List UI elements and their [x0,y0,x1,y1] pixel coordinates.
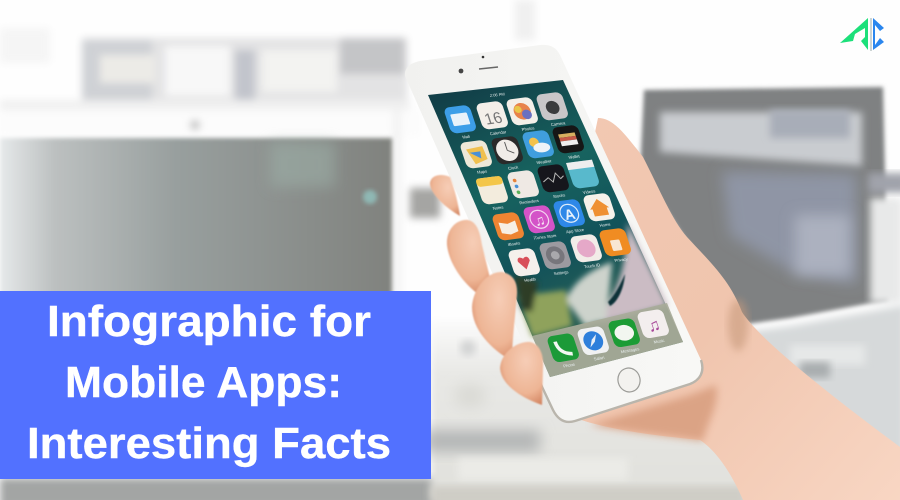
row 1: Mail [462,134,471,140]
monitor [640,87,900,500]
finger 4 [500,342,543,405]
fingers [430,175,543,405]
row 5 [507,228,635,284]
dock icons: Phone [562,362,576,369]
row 4: iBooks [507,241,521,247]
row 2: Wallet [568,153,581,160]
row 1: Calendar [489,129,508,136]
title text: Interesting Facts [27,419,391,468]
row 5: Settings [553,269,569,276]
row 4: iTunes Store [533,233,558,241]
row 3: Notes [492,205,504,211]
logo: divider [870,18,872,51]
finger 1 [430,175,460,216]
title text: Infographic for [47,297,371,346]
row 5: Touch ID [583,262,601,269]
earpiece and camera [459,56,498,73]
wallpaper dark slash [608,274,625,306]
row 4: ♫ [532,213,548,230]
row 1: 16 [482,110,505,129]
logo [840,18,884,51]
row 3: Stocks [552,193,566,199]
phone body [405,45,702,422]
row 5: Privacy [614,256,629,263]
row 3 [475,160,603,212]
dock icons: Messages [620,346,640,354]
row 2: Maps [476,169,488,175]
logo: blue C [873,18,884,50]
row 2: Clock [507,165,520,171]
row 2: Weather [536,158,553,165]
screen wallpaper [428,80,683,377]
wallpaper swirl [514,222,668,337]
row 4: Home [599,222,612,228]
row 3: Reminders [519,198,540,205]
row 3: Videos [582,189,596,195]
dock icons: ♫ [645,315,663,336]
row 4: App Store [565,227,585,234]
status bar: 2:06 PM [490,91,505,98]
app icons [443,92,673,370]
dock icons: Music [653,338,665,345]
lower desk [0,478,440,500]
phone [405,45,702,422]
title text [27,297,391,468]
row 4 [491,193,619,248]
laptop screen [0,138,392,298]
row 1: Photos [521,125,535,132]
title panel [0,291,431,479]
home button [615,366,643,394]
logo: green A [840,18,868,50]
finger 2 [447,220,490,294]
phone edge highlight [535,360,702,422]
hand and forearm behind the phone [560,118,900,500]
row 1 [443,92,572,141]
row 1: Camera [550,120,567,127]
title text: Mobile Apps: [65,358,342,407]
finger 3 [472,272,517,361]
dock [532,303,683,377]
row 2 [459,125,588,176]
row 4: A [562,207,578,224]
dock icons [546,309,673,370]
row 5: Health [523,276,537,283]
dock icons: Safari [593,355,605,362]
